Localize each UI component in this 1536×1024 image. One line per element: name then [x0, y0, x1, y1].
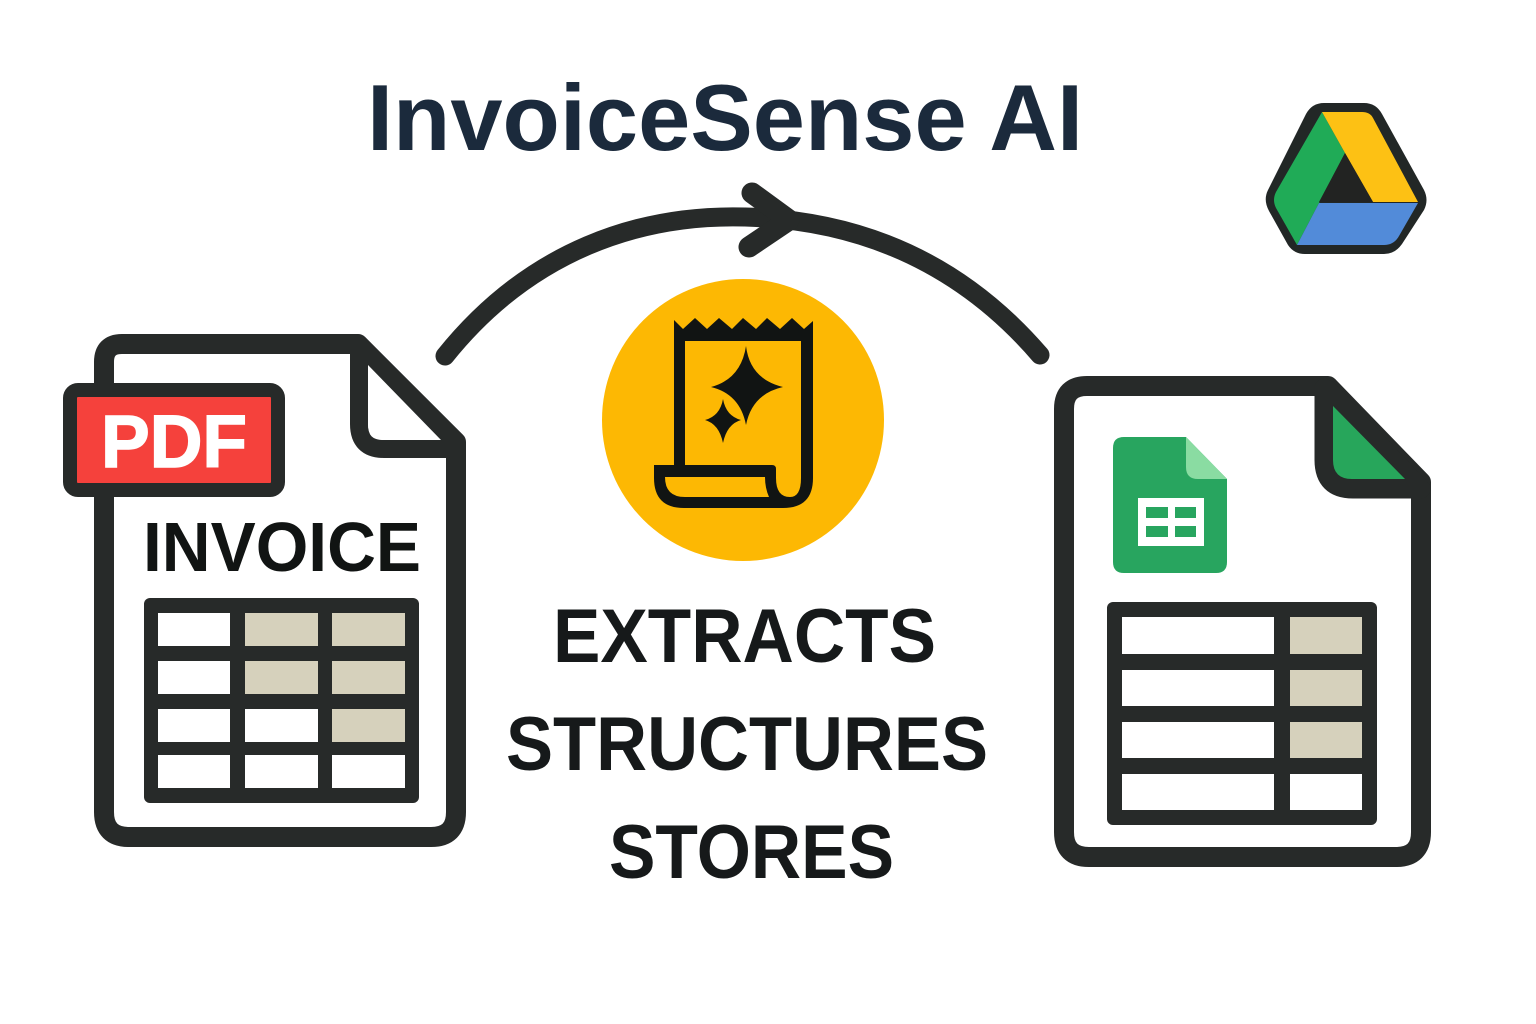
- heading: INVOICE: INVOICE: [143, 508, 421, 586]
- text block: process steps: STRUCTURES: [506, 702, 988, 787]
- arrow: curved flow from invoice to sheet: [445, 193, 1040, 356]
- title: InvoiceSense AI: [367, 65, 1083, 170]
- icon: google drive: [1266, 103, 1426, 254]
- document fold: [1324, 388, 1421, 489]
- text block: process steps: [506, 594, 988, 895]
- document outline: [104, 344, 456, 837]
- badge: PDF: PDF: [101, 400, 247, 483]
- table: extracted rows: [1107, 602, 1377, 825]
- icon: google sheets: [1113, 437, 1227, 573]
- icon: AI receipt in yellow circle: [602, 279, 884, 561]
- table: invoice rows: [144, 598, 419, 803]
- text block: process steps: EXTRACTS: [553, 594, 936, 679]
- document fold: [359, 345, 456, 449]
- panel: spreadsheet document: [1064, 386, 1421, 857]
- text block: process steps: STORES: [609, 810, 894, 895]
- panel: pdf invoice document: [70, 344, 456, 837]
- badge: PDF: [70, 390, 278, 490]
- document outline: [1064, 386, 1421, 857]
